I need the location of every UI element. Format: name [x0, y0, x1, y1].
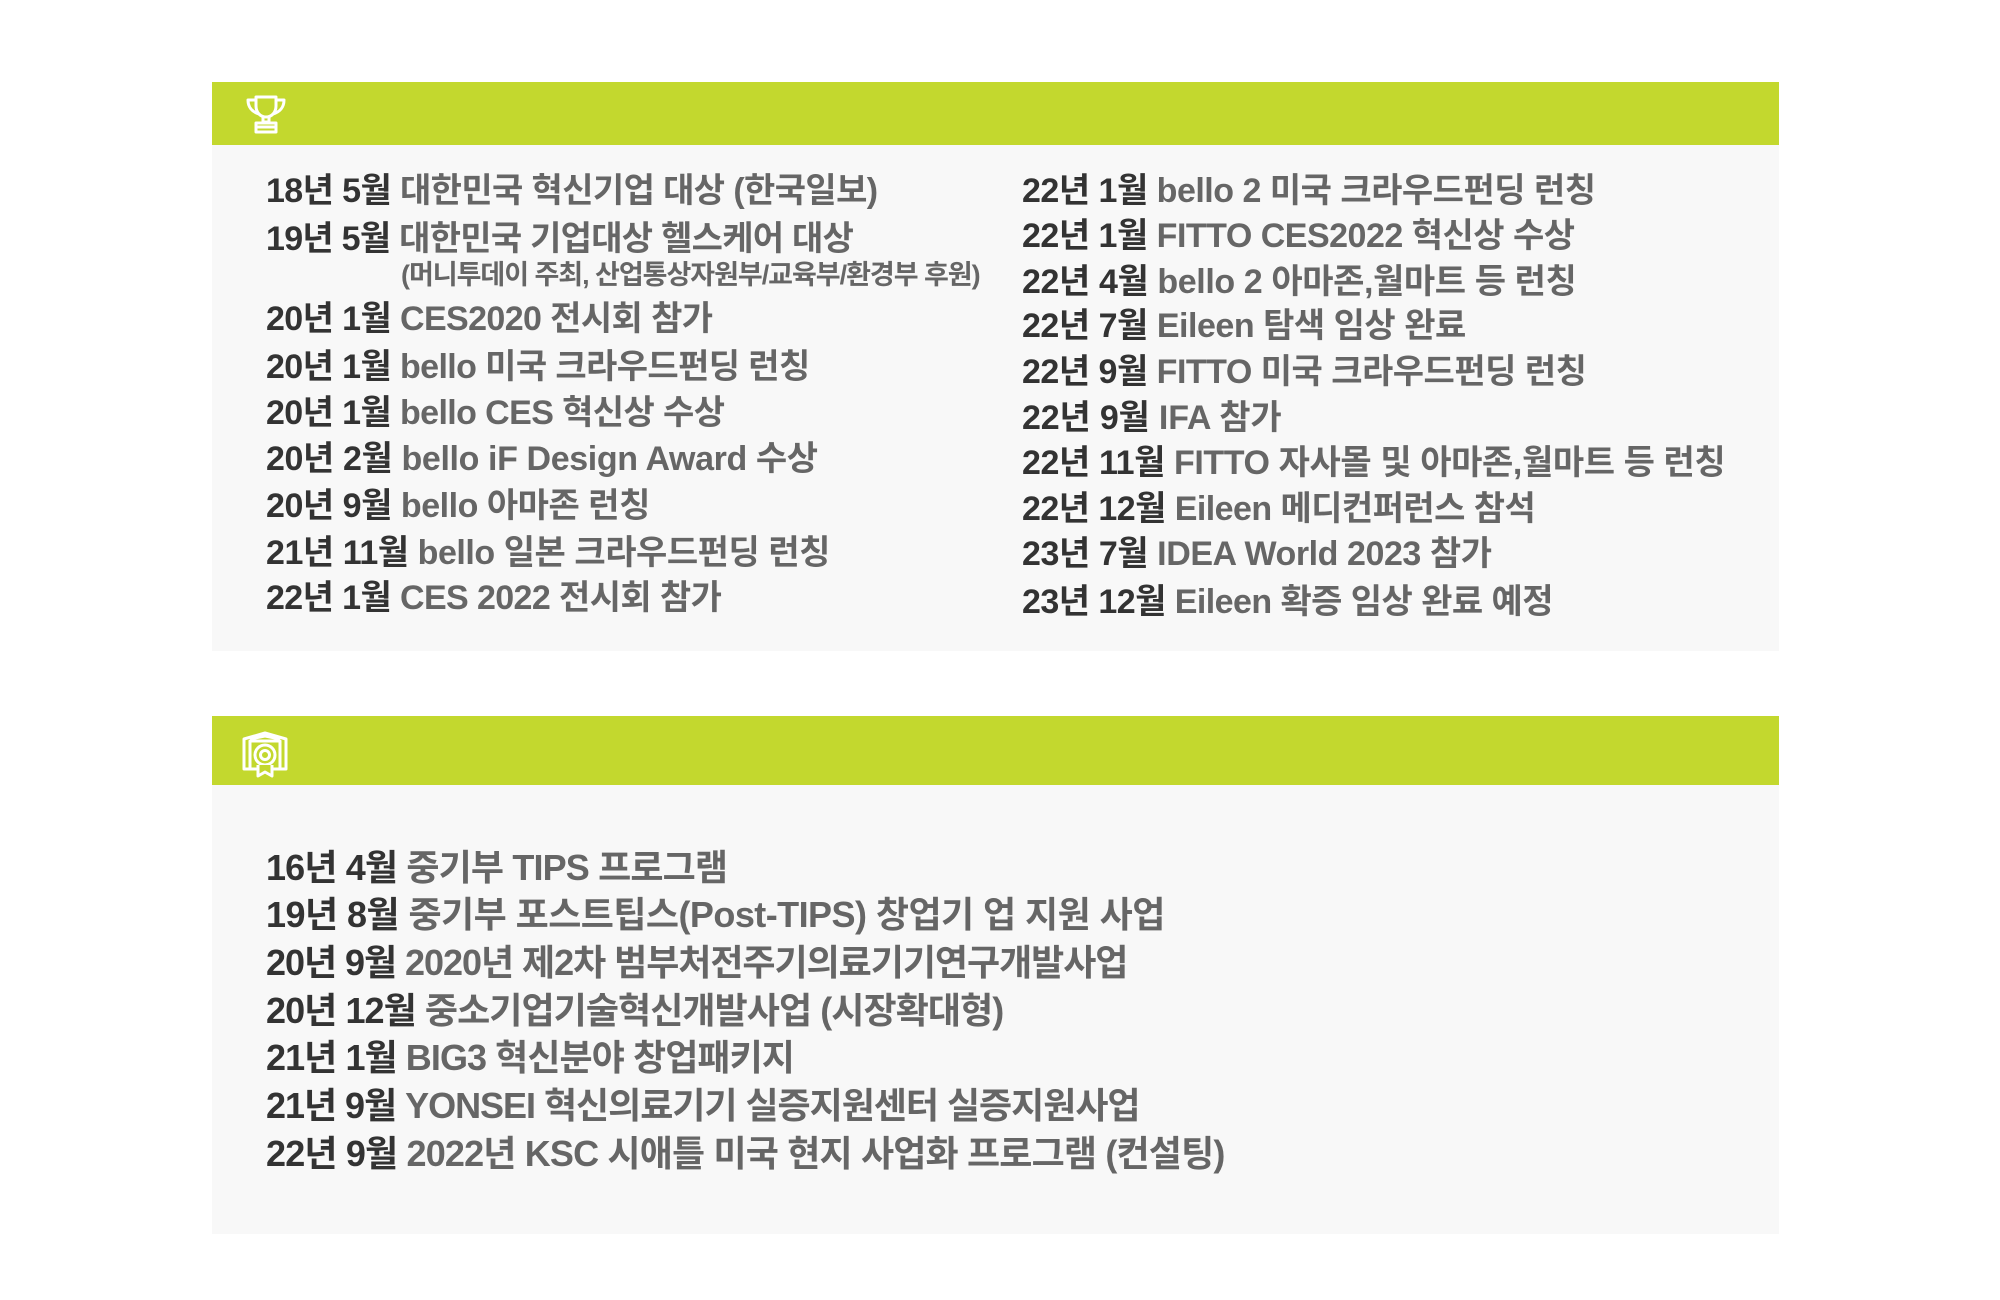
text: government programs list: 16년 4월 중기부 TIPS 프로그램 [266, 847, 727, 888]
text: awards right column: 22년 9월 FITTO 미국 크라우드펀딩 런칭 [1022, 353, 1586, 391]
text: awards right column: 23년 12월 Eileen 확증 임상 완료 예정 [1022, 583, 1553, 621]
text: government programs list: 20년 9월 2020년 제2차 범부처전주기의료기기연구개발사업 [266, 942, 1127, 983]
panel: government programs [212, 716, 1779, 1234]
text: awards right column: 22년 4월 bello 2 아마존,월마트 등 런칭 [1022, 263, 1576, 301]
text: awards right column: 22년 1월 bello 2 미국 크라우드펀딩 런칭 [1022, 172, 1596, 210]
text: government programs list [266, 847, 1225, 1174]
text: awards left column: 19년 5월 대한민국 기업대상 헬스케어 대상 [266, 220, 853, 258]
text: awards left column: 18년 5월 대한민국 혁신기업 대상 (한국일보) [266, 172, 878, 210]
text: government programs list: 21년 9월 YONSEI 혁신의료기기 실증지원센터 실증지원사업 [266, 1085, 1140, 1126]
text: awards right column: 22년 7월 Eileen 탐색 임상 완료 [1022, 307, 1466, 345]
text: government programs list: 20년 12월 중소기업기술혁신개발사업 (시장확대형) [266, 990, 1003, 1031]
header bar: programs [212, 716, 1779, 785]
text: awards right column: 22년 12월 Eileen 메디컨퍼런스 참석 [1022, 490, 1535, 528]
icon: certificate badge [242, 732, 288, 778]
text: awards left column: 20년 2월 bello iF Design Award 수상 [266, 440, 818, 478]
text: awards right column: 22년 11월 FITTO 자사몰 및 아마존,월마트 등 런칭 [1022, 444, 1725, 482]
text: awards right column: 23년 7월 IDEA World 2023 참가 [1022, 535, 1492, 573]
text: awards left column [266, 172, 980, 617]
text: awards right column [1022, 172, 1725, 621]
text: awards left column: 21년 11월 bello 일본 크라우드펀딩 런칭 [266, 534, 830, 572]
icon: trophy [246, 96, 286, 134]
header bar: awards [212, 82, 1779, 145]
text: awards left column: 20년 9월 bello 아마존 런칭 [266, 487, 650, 525]
text: awards left column: 20년 1월 CES2020 전시회 참가 [266, 300, 712, 338]
text: awards left column: 20년 1월 bello CES 혁신상 수상 [266, 394, 724, 432]
text: awards left column: 22년 1월 CES 2022 전시회 참가 [266, 579, 721, 617]
text: awards right column: 22년 1월 FITTO CES2022 혁신상 수상 [1022, 217, 1575, 255]
text: government programs list: 21년 1월 BIG3 혁신분야 창업패키지 [266, 1037, 794, 1078]
text: awards right column: 22년 9월 IFA 참가 [1022, 399, 1281, 437]
text: awards left column: (머니투데이 주최, 산업통상자원부/교육부/환경부 후원) [401, 260, 980, 290]
text: awards left column: 20년 1월 bello 미국 크라우드펀딩 런칭 [266, 348, 810, 386]
text: government programs list: 22년 9월 2022년 KSC 시애틀 미국 현지 사업화 프로그램 (컨설팅) [266, 1133, 1225, 1174]
panel: awards and milestones [212, 82, 1779, 651]
text: government programs list: 19년 8월 중기부 포스트팁스(Post-TIPS) 창업기 업 지원 사업 [266, 894, 1165, 935]
